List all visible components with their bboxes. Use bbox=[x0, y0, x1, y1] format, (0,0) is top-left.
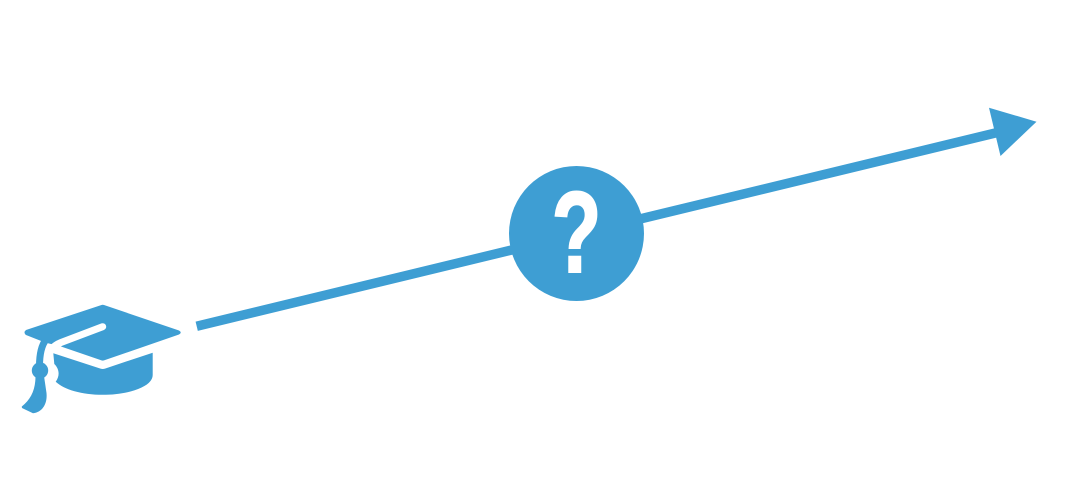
cap board bbox=[24, 305, 181, 361]
tassel knob bbox=[32, 362, 48, 379]
tassel bbox=[22, 376, 47, 413]
white strap bbox=[52, 327, 103, 349]
arrow: rising path from graduation cap bbox=[197, 108, 1036, 326]
icon: question mark circle: ? bbox=[552, 169, 601, 297]
icon: graduation cap bbox=[22, 305, 181, 413]
icon: question mark circle bbox=[509, 166, 644, 301]
tassel cord bbox=[40, 340, 46, 366]
cap base bbox=[53, 353, 153, 395]
